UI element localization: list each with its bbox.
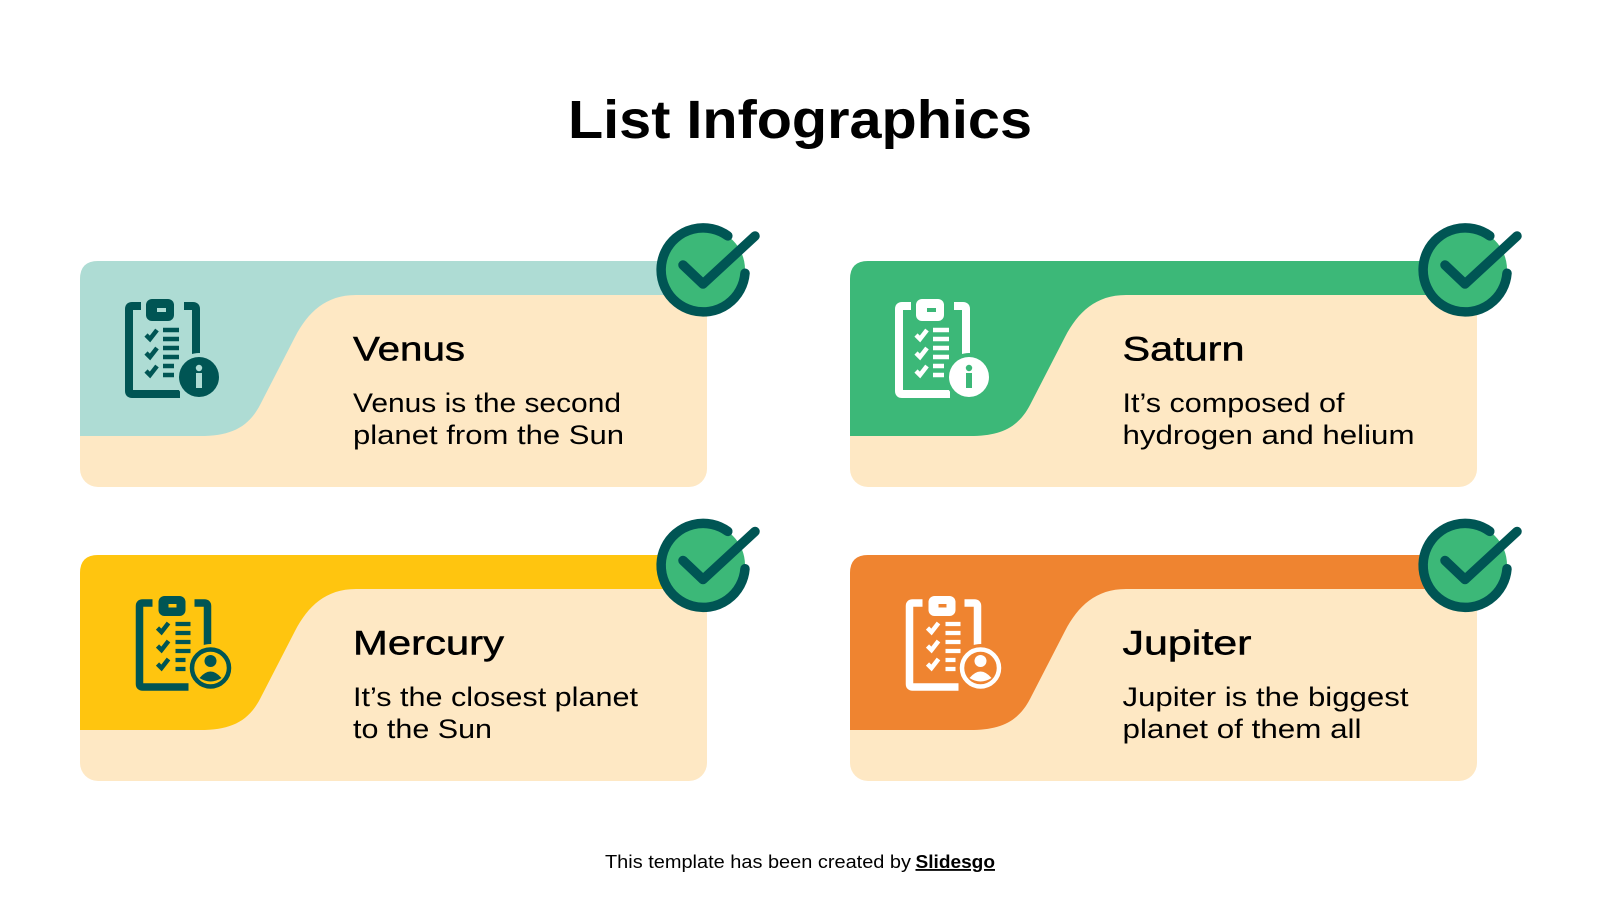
description: Venus is the second bbox=[353, 388, 621, 418]
card background bbox=[850, 555, 1477, 781]
description bbox=[1122, 682, 1409, 744]
colored header shape bbox=[80, 261, 707, 436]
description: planet from the Sun bbox=[353, 420, 624, 450]
heading: Saturn bbox=[1122, 330, 1244, 368]
icon: clipboard info bbox=[129, 299, 223, 401]
description bbox=[353, 682, 639, 744]
title: List Infographics bbox=[568, 90, 1032, 150]
description: hydrogen and helium bbox=[1122, 420, 1414, 450]
footer credit: This template has been created by bbox=[605, 851, 912, 872]
description: Jupiter is the biggest bbox=[1122, 682, 1409, 712]
heading: Mercury bbox=[353, 624, 504, 662]
icon: clipboard info bbox=[899, 299, 993, 401]
icon: clipboard user bbox=[910, 596, 1004, 692]
panel: Venus bbox=[80, 228, 755, 487]
card background bbox=[80, 261, 707, 487]
panel: Saturn bbox=[850, 228, 1517, 487]
icon: check badge bbox=[661, 228, 755, 312]
panel: Mercury bbox=[80, 523, 755, 781]
footer credit: Slidesgo bbox=[916, 851, 995, 872]
description bbox=[353, 388, 624, 450]
description: It’s composed of bbox=[1122, 388, 1345, 418]
heading: Venus bbox=[353, 330, 465, 368]
colored header shape bbox=[850, 261, 1477, 436]
description: to the Sun bbox=[353, 714, 492, 744]
description: It’s the closest planet bbox=[353, 682, 639, 712]
icon: check badge bbox=[661, 523, 755, 607]
description: planet of them all bbox=[1122, 714, 1362, 744]
description bbox=[1122, 388, 1414, 450]
icon: clipboard user bbox=[140, 596, 234, 692]
icon: check badge bbox=[1423, 228, 1517, 312]
colored header shape bbox=[80, 555, 707, 730]
card background bbox=[80, 555, 707, 781]
heading: Jupiter bbox=[1122, 624, 1252, 662]
card background bbox=[850, 261, 1477, 487]
panel: Jupiter bbox=[850, 523, 1517, 781]
colored header shape bbox=[850, 555, 1477, 730]
icon: check badge bbox=[1423, 523, 1517, 607]
